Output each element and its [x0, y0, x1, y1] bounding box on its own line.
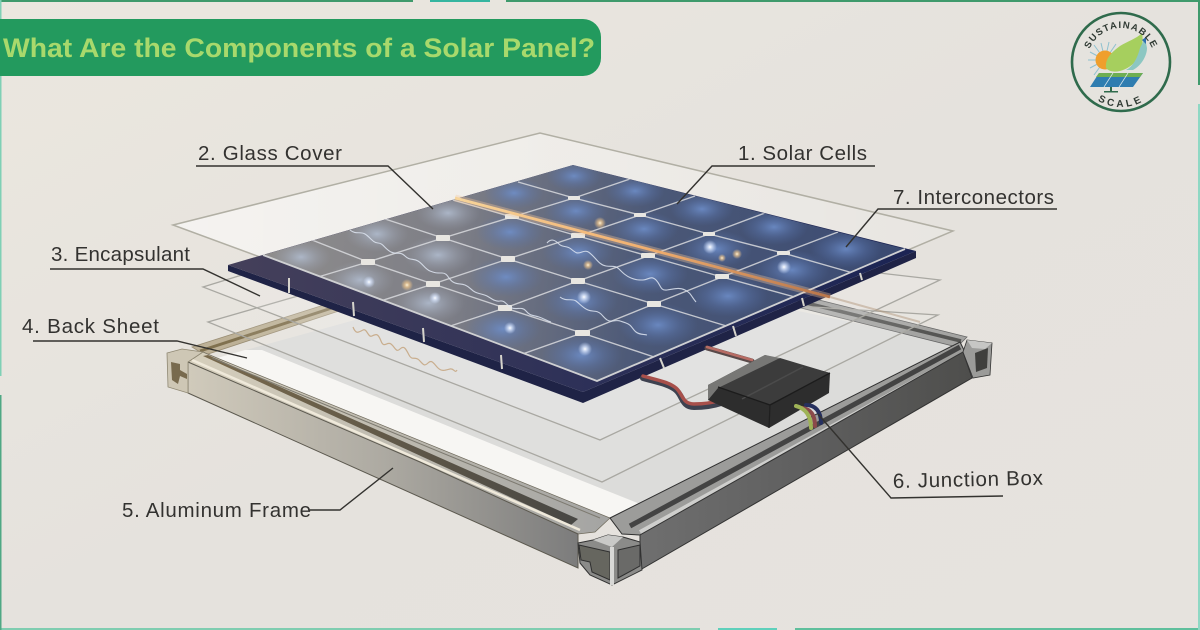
label: 2. Glass Cover	[196, 142, 433, 209]
label: 4. Back Sheet	[22, 315, 247, 358]
title banner: What Are the Components of a Solar Panel?	[3, 33, 595, 63]
cell field	[263, 161, 905, 381]
front-left face	[188, 362, 578, 568]
label: 3. Encapsulant	[50, 243, 260, 296]
front-right rail	[610, 342, 965, 535]
rear rails	[192, 303, 345, 355]
panel side thickness	[228, 251, 916, 403]
label: 4. Back Sheet: 4. Back Sheet	[22, 315, 159, 338]
current wiggles	[350, 230, 696, 335]
label: 7. Interconectors: 7. Interconectors	[893, 186, 1054, 209]
label: 5. Aluminum Frame	[122, 468, 393, 522]
front-right face	[640, 352, 972, 570]
interconnector glow line	[455, 198, 920, 322]
label: 2. Glass Cover: 2. Glass Cover	[198, 142, 342, 165]
cell grid lines	[288, 179, 860, 362]
aluminum frame	[167, 262, 992, 585]
junction box	[708, 355, 830, 428]
corner block: right	[963, 340, 992, 378]
label: 6. Junction Box	[818, 414, 1044, 498]
corner block: left	[167, 349, 203, 393]
front-left rail	[188, 352, 610, 534]
logo: Sustainable Scale: SCALE	[1098, 95, 1142, 107]
label: 3. Encapsulant: 3. Encapsulant	[51, 243, 190, 266]
label: 7. Interconectors	[846, 186, 1057, 247]
label: 5. Aluminum Frame: 5. Aluminum Frame	[122, 499, 311, 522]
glass cover	[173, 133, 953, 381]
corner block: bottom	[578, 535, 642, 585]
back sheet layer outline	[208, 278, 938, 482]
heat wave	[353, 327, 457, 371]
label: 6. Junction Box: 6. Junction Box	[893, 467, 1044, 493]
cell glows: grey side	[278, 200, 473, 318]
sparkles	[363, 217, 791, 356]
output cables	[796, 405, 821, 428]
logo sun rays	[1088, 42, 1116, 75]
title banner	[0, 19, 601, 76]
encapsulant layer outline	[203, 220, 940, 440]
logo: Sustainable Scale	[1070, 12, 1172, 112]
cell glows: blue side	[465, 161, 882, 377]
logo sun	[1096, 50, 1114, 70]
label: 1. Solar Cells	[677, 142, 875, 204]
logo solar panel	[1090, 73, 1143, 92]
label: 1. Solar Cells: 1. Solar Cells	[738, 142, 867, 165]
solar panel	[228, 161, 916, 403]
cell corner gaps	[361, 196, 790, 336]
glass edge over panel	[263, 249, 905, 381]
exposed panel top	[228, 165, 916, 392]
band dividers	[289, 273, 862, 369]
wiring	[643, 347, 752, 407]
logo leaf	[1106, 33, 1147, 72]
logo lettering: SUSTAINABLE	[1084, 21, 1158, 48]
frame interior	[217, 262, 960, 518]
